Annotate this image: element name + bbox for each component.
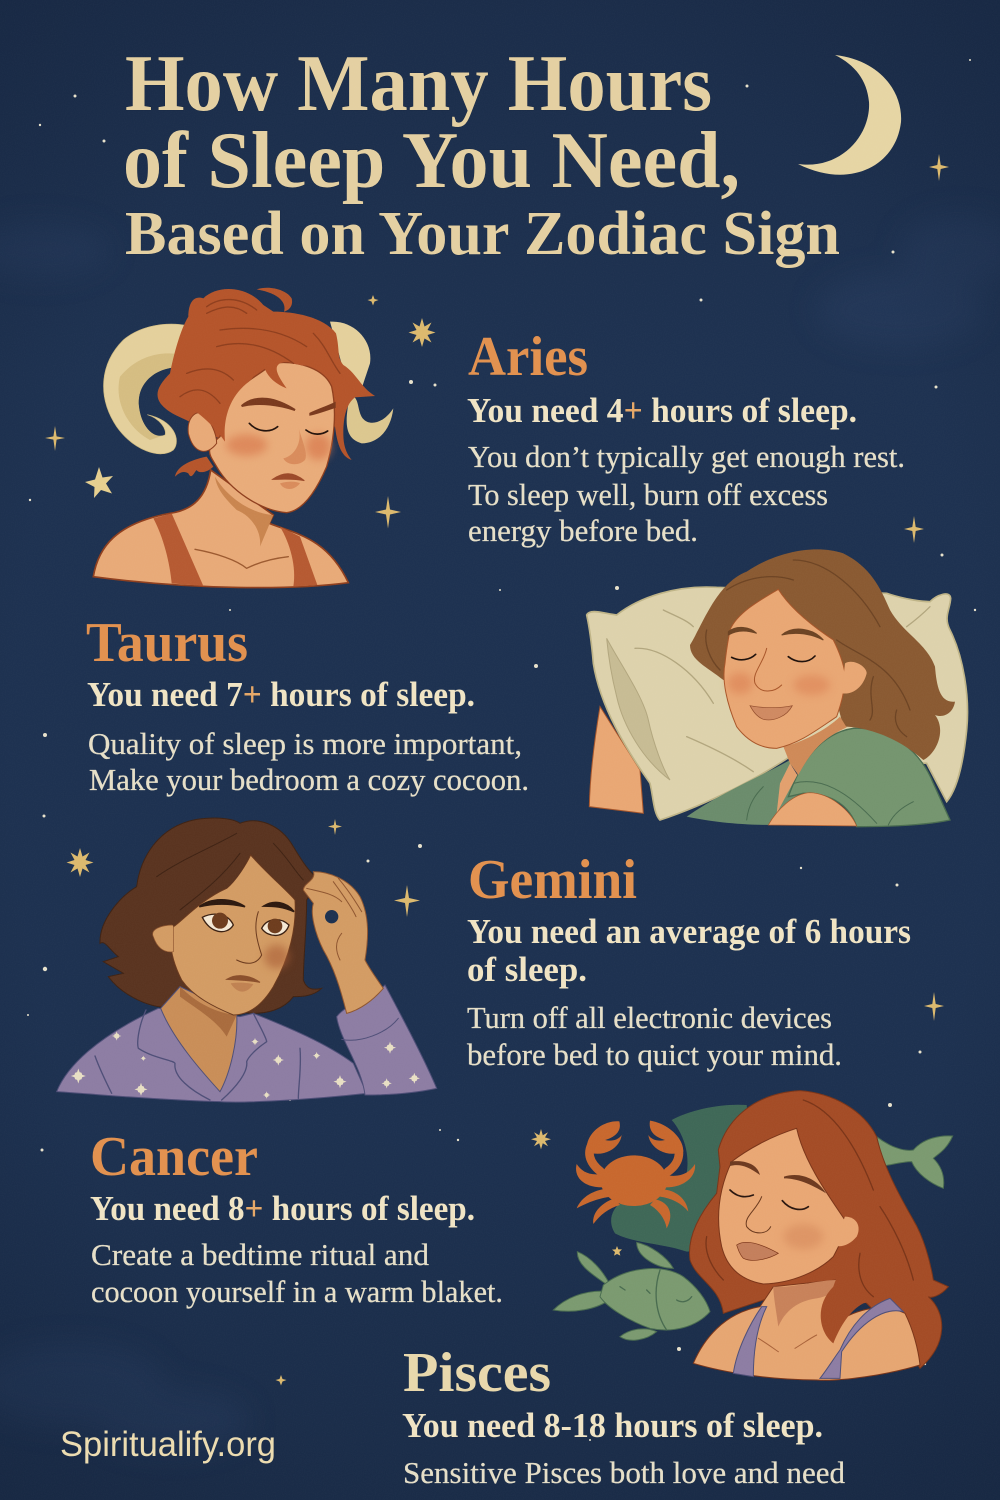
heading: Taurus: Taurus (86, 612, 248, 674)
arm (589, 707, 643, 813)
advice: Make your bedroom a cozy cocoon. (89, 762, 529, 797)
icon: ram horns (104, 322, 393, 454)
title (123, 40, 840, 268)
hair (690, 549, 955, 760)
illustration: Aries woman with ram horns (93, 288, 393, 588)
hair side lock (821, 1223, 893, 1343)
ear (842, 662, 867, 694)
title: How Many Hours (125, 40, 712, 128)
icon: left fish (553, 1242, 710, 1340)
neck and chest (783, 717, 847, 775)
green cloud (611, 1105, 760, 1252)
sleep hours: of sleep. (467, 950, 587, 989)
panel: Pisces text (402, 1342, 845, 1490)
face (724, 589, 845, 748)
title: Based on Your Zodiac Sign (125, 200, 840, 268)
panel: Gemini text (467, 849, 911, 1072)
facial features (728, 627, 823, 720)
neck and chest (161, 987, 237, 1092)
ear (188, 412, 217, 451)
sleep hours: You need 7+ hours of sleep. (87, 675, 475, 714)
icon: right fish (877, 1136, 953, 1188)
sleep hours: You need 8+ hours of sleep. (90, 1189, 475, 1228)
hair fringe (177, 337, 343, 442)
hair fringe (150, 830, 307, 926)
heading: Aries: Aries (468, 326, 588, 388)
ear (833, 1217, 859, 1246)
face (171, 855, 295, 1015)
sleep hours: You need an average of 6 hours (467, 912, 911, 951)
sleep hours: You need 8-18 hours of sleep. (402, 1406, 823, 1445)
advice: You don’t typically get enough rest. (468, 439, 905, 474)
shoulders and neck (93, 470, 348, 588)
straps (733, 1298, 903, 1378)
pajama stars (71, 1031, 420, 1099)
sleeve (337, 985, 437, 1095)
advice (91, 1237, 503, 1309)
face (210, 363, 334, 513)
advice: Turn off all electronic devices (467, 1000, 832, 1035)
heading: Gemini: Gemini (468, 849, 637, 911)
brand: Spiritualify.org: Spiritualify.org (60, 1425, 276, 1464)
facial features (242, 399, 335, 489)
icon: crab (576, 1121, 695, 1228)
advice: energy before bed. (468, 513, 698, 548)
facial features (199, 900, 294, 992)
advice (468, 439, 905, 548)
moon (798, 55, 901, 175)
pajama body (57, 1008, 367, 1102)
hair (100, 818, 322, 1013)
forearm (768, 793, 857, 826)
pillow (587, 587, 968, 820)
advice (88, 726, 529, 797)
advice: Create a bedtime ritual and (91, 1237, 430, 1272)
sleep hours (467, 912, 911, 989)
advice: Quality of sleep is more important, (88, 726, 522, 761)
advice: Sensitive Pisces both love and need (403, 1455, 845, 1490)
panel: Aries text (467, 326, 905, 548)
hair back (158, 289, 375, 460)
illustration: Gemini woman awake in pajamas (57, 818, 437, 1102)
chest (693, 1280, 920, 1380)
illustration: Cancer and Pisces woman with crab and fish (553, 1091, 953, 1380)
panel: Cancer text (90, 1126, 503, 1309)
advice (467, 1000, 842, 1072)
advice: To sleep well, burn off excess (468, 477, 828, 512)
advice: before bed to quict your mind. (467, 1037, 842, 1072)
ear (153, 925, 173, 952)
facial features (730, 1161, 826, 1260)
hair (689, 1091, 948, 1368)
heading: Pisces: Pisces (403, 1342, 551, 1404)
title: of Sleep You Need, (123, 117, 740, 205)
illustration: Taurus woman on pillow (587, 549, 968, 827)
star (612, 1246, 622, 1256)
shirt (687, 760, 800, 825)
heading: Cancer: Cancer (90, 1126, 258, 1188)
panel: Taurus text (86, 612, 529, 797)
advice: cocoon yourself in a warm blaket. (91, 1274, 503, 1309)
sleep hours: You need 4+ hours of sleep. (467, 391, 857, 430)
face (719, 1128, 845, 1284)
collar (95, 1010, 300, 1100)
hand (303, 872, 383, 1013)
